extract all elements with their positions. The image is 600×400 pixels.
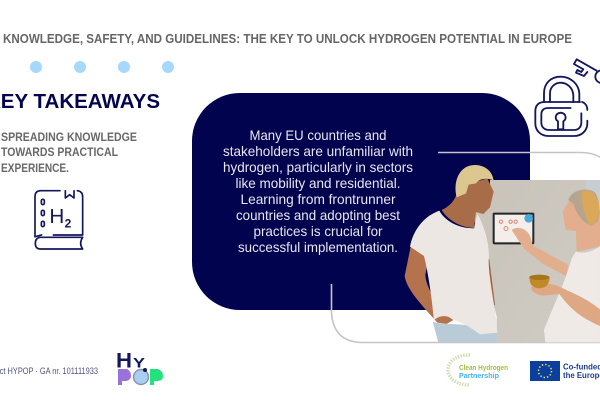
subheading text: TOWARDS PRACTICAL <box>1 145 118 159</box>
woman <box>512 190 600 342</box>
mug <box>529 275 550 288</box>
hair <box>456 165 494 197</box>
logo: HyPOP: H <box>116 350 132 372</box>
man left arm <box>405 247 453 324</box>
connector line: top <box>438 152 600 160</box>
photo wall background <box>473 180 586 342</box>
photo: two people at a wall tablet <box>405 165 600 342</box>
logo: Clean Hydrogen Partnership: Clean Hydrogen <box>459 363 508 372</box>
connector line: bottom <box>332 284 600 342</box>
decorative dots row <box>30 61 174 73</box>
tablet on wall <box>493 213 534 244</box>
logo: HyPOP: Y <box>133 354 146 370</box>
shirt <box>410 211 497 334</box>
woman shirt <box>544 246 600 342</box>
callout paragraph: stakeholders are unfamiliar with <box>223 144 413 159</box>
callout paragraph: hydrogen, particularly in sectors <box>223 160 413 175</box>
photo right strip <box>586 180 600 342</box>
callout paragraph: Many EU countries and <box>250 128 386 143</box>
woman forearm <box>531 283 600 326</box>
icon: padlock and key <box>535 59 600 136</box>
logo: Clean Hydrogen Partnership: Partnership <box>459 371 499 380</box>
man right arm <box>485 258 495 307</box>
jeans <box>433 322 497 342</box>
callout paragraph: successful implementation. <box>238 240 398 255</box>
logo: EU co-funded <box>530 361 600 381</box>
man <box>405 165 497 342</box>
woman hair <box>568 190 599 226</box>
icon: hydrogen book <box>35 191 83 249</box>
panel: main navy callout <box>192 93 530 310</box>
woman raised arm <box>512 228 568 276</box>
callout paragraph: Learning from frontrunner <box>240 192 396 207</box>
callout paragraph <box>223 128 413 255</box>
callout paragraph: countries and adopting best <box>236 208 400 223</box>
callout paragraph: practices is crucial for <box>254 224 383 239</box>
subheading text: SPREADING KNOWLEDGE <box>1 130 137 144</box>
callout paragraph: like mobility and residential. <box>236 176 400 191</box>
logo: Clean Hydrogen Partnership <box>448 355 508 385</box>
icon: hydrogen book: H <box>49 205 64 228</box>
logo: HyPOP <box>116 350 163 385</box>
subheading text <box>1 130 137 175</box>
subheading text: EXPERIENCE. <box>1 161 69 175</box>
icon: hydrogen book: 2 <box>65 216 72 230</box>
woman neck and face <box>563 197 600 252</box>
neck and face <box>442 178 494 228</box>
